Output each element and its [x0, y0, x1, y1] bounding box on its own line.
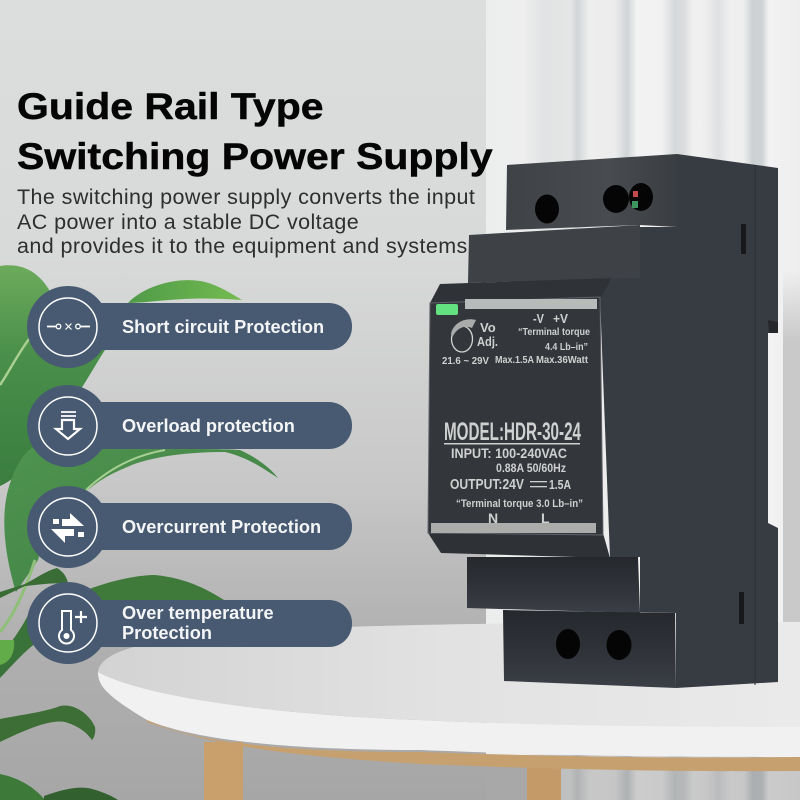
label text	[442, 311, 590, 526]
icon: opposing arrows	[38, 497, 98, 557]
plant leaves	[0, 265, 278, 800]
label text: N	[488, 510, 498, 526]
description text: The switching power supply converts the input	[17, 185, 475, 209]
label cap	[430, 278, 612, 303]
icon: thermometer	[38, 593, 98, 653]
description text: and provides it to the equipment and systems	[17, 234, 468, 258]
feature: overcurrent protection: Overcurrent Protection	[122, 517, 321, 537]
label text: 21.6 ~ 29V	[442, 356, 489, 367]
feature: overcurrent protection	[27, 486, 352, 568]
device front label	[428, 297, 603, 535]
table wood rim	[147, 720, 800, 771]
label text: +V	[553, 311, 568, 326]
table edge	[98, 672, 800, 757]
feature: short circuit protection	[27, 286, 352, 368]
feature: over temperature protection: Over temperature	[122, 603, 274, 623]
description text	[17, 185, 475, 258]
title: Switching Power Supply	[17, 136, 493, 177]
feature: over temperature protection	[27, 582, 352, 664]
label text: MODEL:HDR-30-24	[444, 418, 581, 446]
label text: L	[541, 510, 550, 526]
bottom terminal block	[503, 610, 676, 688]
label text: Vo	[480, 320, 496, 335]
title	[17, 86, 493, 177]
lower cap	[428, 533, 610, 558]
second terminal step	[468, 225, 640, 283]
label strips	[465, 299, 597, 309]
feature: overload protection	[27, 385, 352, 467]
icon: down arrow	[38, 396, 98, 456]
table top	[98, 622, 800, 727]
top terminal block	[506, 154, 677, 230]
label text: Max.36Watt	[536, 355, 589, 366]
power supply device	[428, 154, 778, 688]
top terminal holes	[535, 183, 653, 224]
label text: “Terminal torque 3.0 Lb–in”	[456, 498, 583, 510]
feature: over temperature protection: Protection	[122, 623, 212, 643]
label text: 4.4 Lb–in”	[545, 342, 588, 353]
label text: 0.88A 50/60Hz	[496, 461, 566, 475]
label text: OUTPUT:24V	[450, 477, 524, 493]
description text: AC power into a stable DC voltage	[17, 210, 359, 234]
label text: 1.5A	[549, 477, 571, 492]
label text: Adj.	[477, 334, 498, 349]
label text: “Terminal torque	[518, 327, 590, 338]
lower step	[467, 557, 640, 613]
green LED	[436, 304, 458, 315]
label text: -V	[533, 311, 544, 326]
label text: Max.1.5A	[495, 355, 534, 366]
icon: switch	[38, 297, 98, 357]
title: Guide Rail Type	[17, 86, 324, 127]
table	[98, 622, 800, 800]
feature: short circuit protection: Short circuit Protection	[122, 316, 324, 336]
label text: INPUT: 100-240VAC	[451, 445, 567, 461]
device side body	[600, 154, 778, 688]
adjust knob	[451, 319, 476, 352]
feature: overload protection: Overload protection	[122, 416, 295, 436]
table legs	[204, 742, 561, 800]
